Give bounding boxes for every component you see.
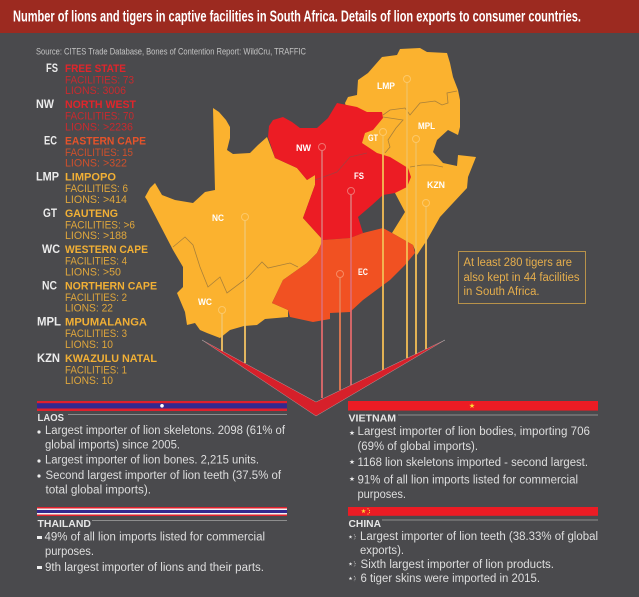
panel: Thailand <box>37 507 287 574</box>
map labels: NC <box>212 213 224 223</box>
legend: North West: FACILITIES: 70 <box>65 110 134 122</box>
legend: Gauteng: GT <box>43 208 57 220</box>
heading: Vietnam: VIETNAM <box>348 412 396 424</box>
legend: Eastern Cape: EC <box>44 136 57 148</box>
legend: Mpumalanga <box>37 317 147 351</box>
legend: Eastern Cape <box>44 136 146 170</box>
list: Thailand facts: purposes. <box>45 546 94 558</box>
legend: Free State: LIONS: 3006 <box>65 85 126 97</box>
legend: Gauteng: GAUTENG <box>65 208 118 220</box>
map labels: KZN <box>427 180 445 190</box>
map of South Africa <box>145 48 476 398</box>
provincial borders <box>173 91 457 293</box>
map labels: WC <box>198 297 212 307</box>
legend: Free State: FREE STATE <box>65 63 126 75</box>
region: Eastern Cape <box>272 228 415 322</box>
legend: Limpopo: FACILITIES: 6 <box>65 183 128 195</box>
list: Vietnam facts: Largest importer of lion bodies, importing 706 <box>358 426 590 438</box>
list: China facts: exports). <box>360 545 404 557</box>
map labels: GT <box>368 133 378 143</box>
legend: Limpopo: LIONS: >414 <box>65 194 127 206</box>
flag: Thailand <box>37 507 287 516</box>
heading: Thailand: THAILAND <box>38 518 91 530</box>
legend: Free State: FACILITIES: 73 <box>65 74 134 86</box>
flag: China <box>348 507 598 516</box>
list: Laos facts <box>37 425 286 496</box>
legend: Western Cape: FACILITIES: 4 <box>65 256 127 268</box>
region: Limpopo, Gauteng, Mpumalanga and KwaZulu Natal <box>345 48 476 255</box>
legend: Eastern Cape: FACILITIES: 15 <box>65 147 133 159</box>
legend: Northern Cape: NC <box>42 280 57 292</box>
legend: Limpopo: LIMPOPO <box>65 172 116 184</box>
panel: Laos <box>37 401 287 496</box>
legend: Mpumalanga: MPUMALANGA <box>65 317 147 329</box>
panel: province legend <box>36 63 157 387</box>
region: Northern and Western Cape <box>145 108 323 338</box>
legend: North West: LIONS: >2236 <box>65 121 133 133</box>
list: China facts: 6 tiger skins were imported in 2015. <box>360 573 540 585</box>
list: Laos facts: Largest importer of lion bones. 2,215 units. <box>45 454 259 466</box>
list: Vietnam facts: purposes. <box>358 489 406 501</box>
list: Vietnam facts: 91% of all lion imports listed for commercial <box>358 474 578 486</box>
list: Laos facts: Second largest importer of lion teeth (37.5% of <box>46 470 282 482</box>
legend: Western Cape <box>42 244 148 278</box>
legend: North West: NW <box>36 99 54 111</box>
source line: Source: CITES Trade Database, Bones of Contention Report: WildCru, TRAFFIC <box>36 46 306 56</box>
legend: Northern Cape: FACILITIES: 2 <box>65 292 127 304</box>
legend: North West: NORTH WEST <box>65 99 136 111</box>
legend: Limpopo <box>36 172 128 206</box>
legend: Eastern Cape: EASTERN CAPE <box>65 136 146 148</box>
map labels <box>198 81 445 307</box>
legend: KwaZulu Natal <box>37 353 157 387</box>
legend: KwaZulu Natal: KWAZULU NATAL <box>65 353 157 365</box>
heading: China: CHINA <box>348 518 381 530</box>
callout: tigers: in South Africa. <box>464 286 540 298</box>
legend: North West <box>36 99 136 133</box>
map labels: LMP <box>377 81 395 91</box>
map labels: NW <box>296 143 311 153</box>
heading: Laos: LAOS <box>38 412 64 424</box>
legend: KwaZulu Natal: KZN <box>37 353 60 365</box>
legend: KwaZulu Natal: LIONS: 10 <box>65 375 113 387</box>
list: Vietnam facts: 1168 lion skeletons imported - second largest. <box>358 457 588 469</box>
list: Thailand facts: 49% of all lion imports listed for commercial <box>44 532 265 544</box>
list: Laos facts: global imports) since 2005. <box>45 440 180 452</box>
legend: Free State <box>46 63 134 97</box>
arrow: export chevron <box>202 340 445 416</box>
legend: Eastern Cape: LIONS: >322 <box>65 158 127 170</box>
list: China facts <box>349 531 598 585</box>
panel: China <box>348 507 598 585</box>
list: Thailand facts <box>37 532 265 574</box>
flag: Laos <box>37 401 287 411</box>
legend: Mpumalanga: FACILITIES: 3 <box>65 328 127 340</box>
callout: tigers <box>458 252 586 304</box>
legend: Gauteng <box>43 208 135 242</box>
flag: Vietnam <box>348 401 598 411</box>
list: China facts: Largest importer of lion teeth (38.33% of global <box>360 531 598 543</box>
list: China facts: Sixth largest importer of lion products. <box>360 559 554 571</box>
panel: Vietnam <box>348 401 598 501</box>
legend: Limpopo: LMP <box>36 172 59 184</box>
map labels: FS <box>354 171 364 181</box>
list: Vietnam facts <box>349 426 590 501</box>
region: North West and Free State <box>268 103 411 240</box>
legend: Northern Cape: NORTHERN CAPE <box>65 280 157 292</box>
list: Laos facts: total global imports). <box>46 484 151 496</box>
legend: Mpumalanga: MPL <box>37 317 61 329</box>
title banner <box>0 0 639 33</box>
callout: tigers: At least 280 tigers are <box>464 257 572 269</box>
list: Thailand facts: 9th largest importer of lions and their parts. <box>45 562 264 574</box>
map labels: MPL <box>418 121 435 131</box>
legend: Western Cape: WC <box>42 244 60 256</box>
pointer lines to the export arrow <box>218 76 430 398</box>
legend: KwaZulu Natal: FACILITIES: 1 <box>65 364 127 376</box>
callout: tigers: also kept in 44 facilities <box>464 272 580 284</box>
legend: Free State: FS <box>46 63 58 75</box>
list: Vietnam facts: (69% of global imports). <box>358 441 478 453</box>
list: Laos facts: Largest importer of lion skeletons. 2098 (61% of <box>45 425 286 437</box>
legend: Gauteng: LIONS: >188 <box>65 230 127 242</box>
legend: Mpumalanga: LIONS: 10 <box>65 339 113 351</box>
map labels: EC <box>358 267 368 277</box>
legend: Northern Cape: LIONS: 22 <box>65 303 113 315</box>
legend: Western Cape: LIONS: >50 <box>65 266 121 278</box>
legend: Western Cape: WESTERN CAPE <box>65 244 148 256</box>
legend: Gauteng: FACILITIES: >6 <box>65 219 135 231</box>
legend: Northern Cape <box>42 280 157 315</box>
